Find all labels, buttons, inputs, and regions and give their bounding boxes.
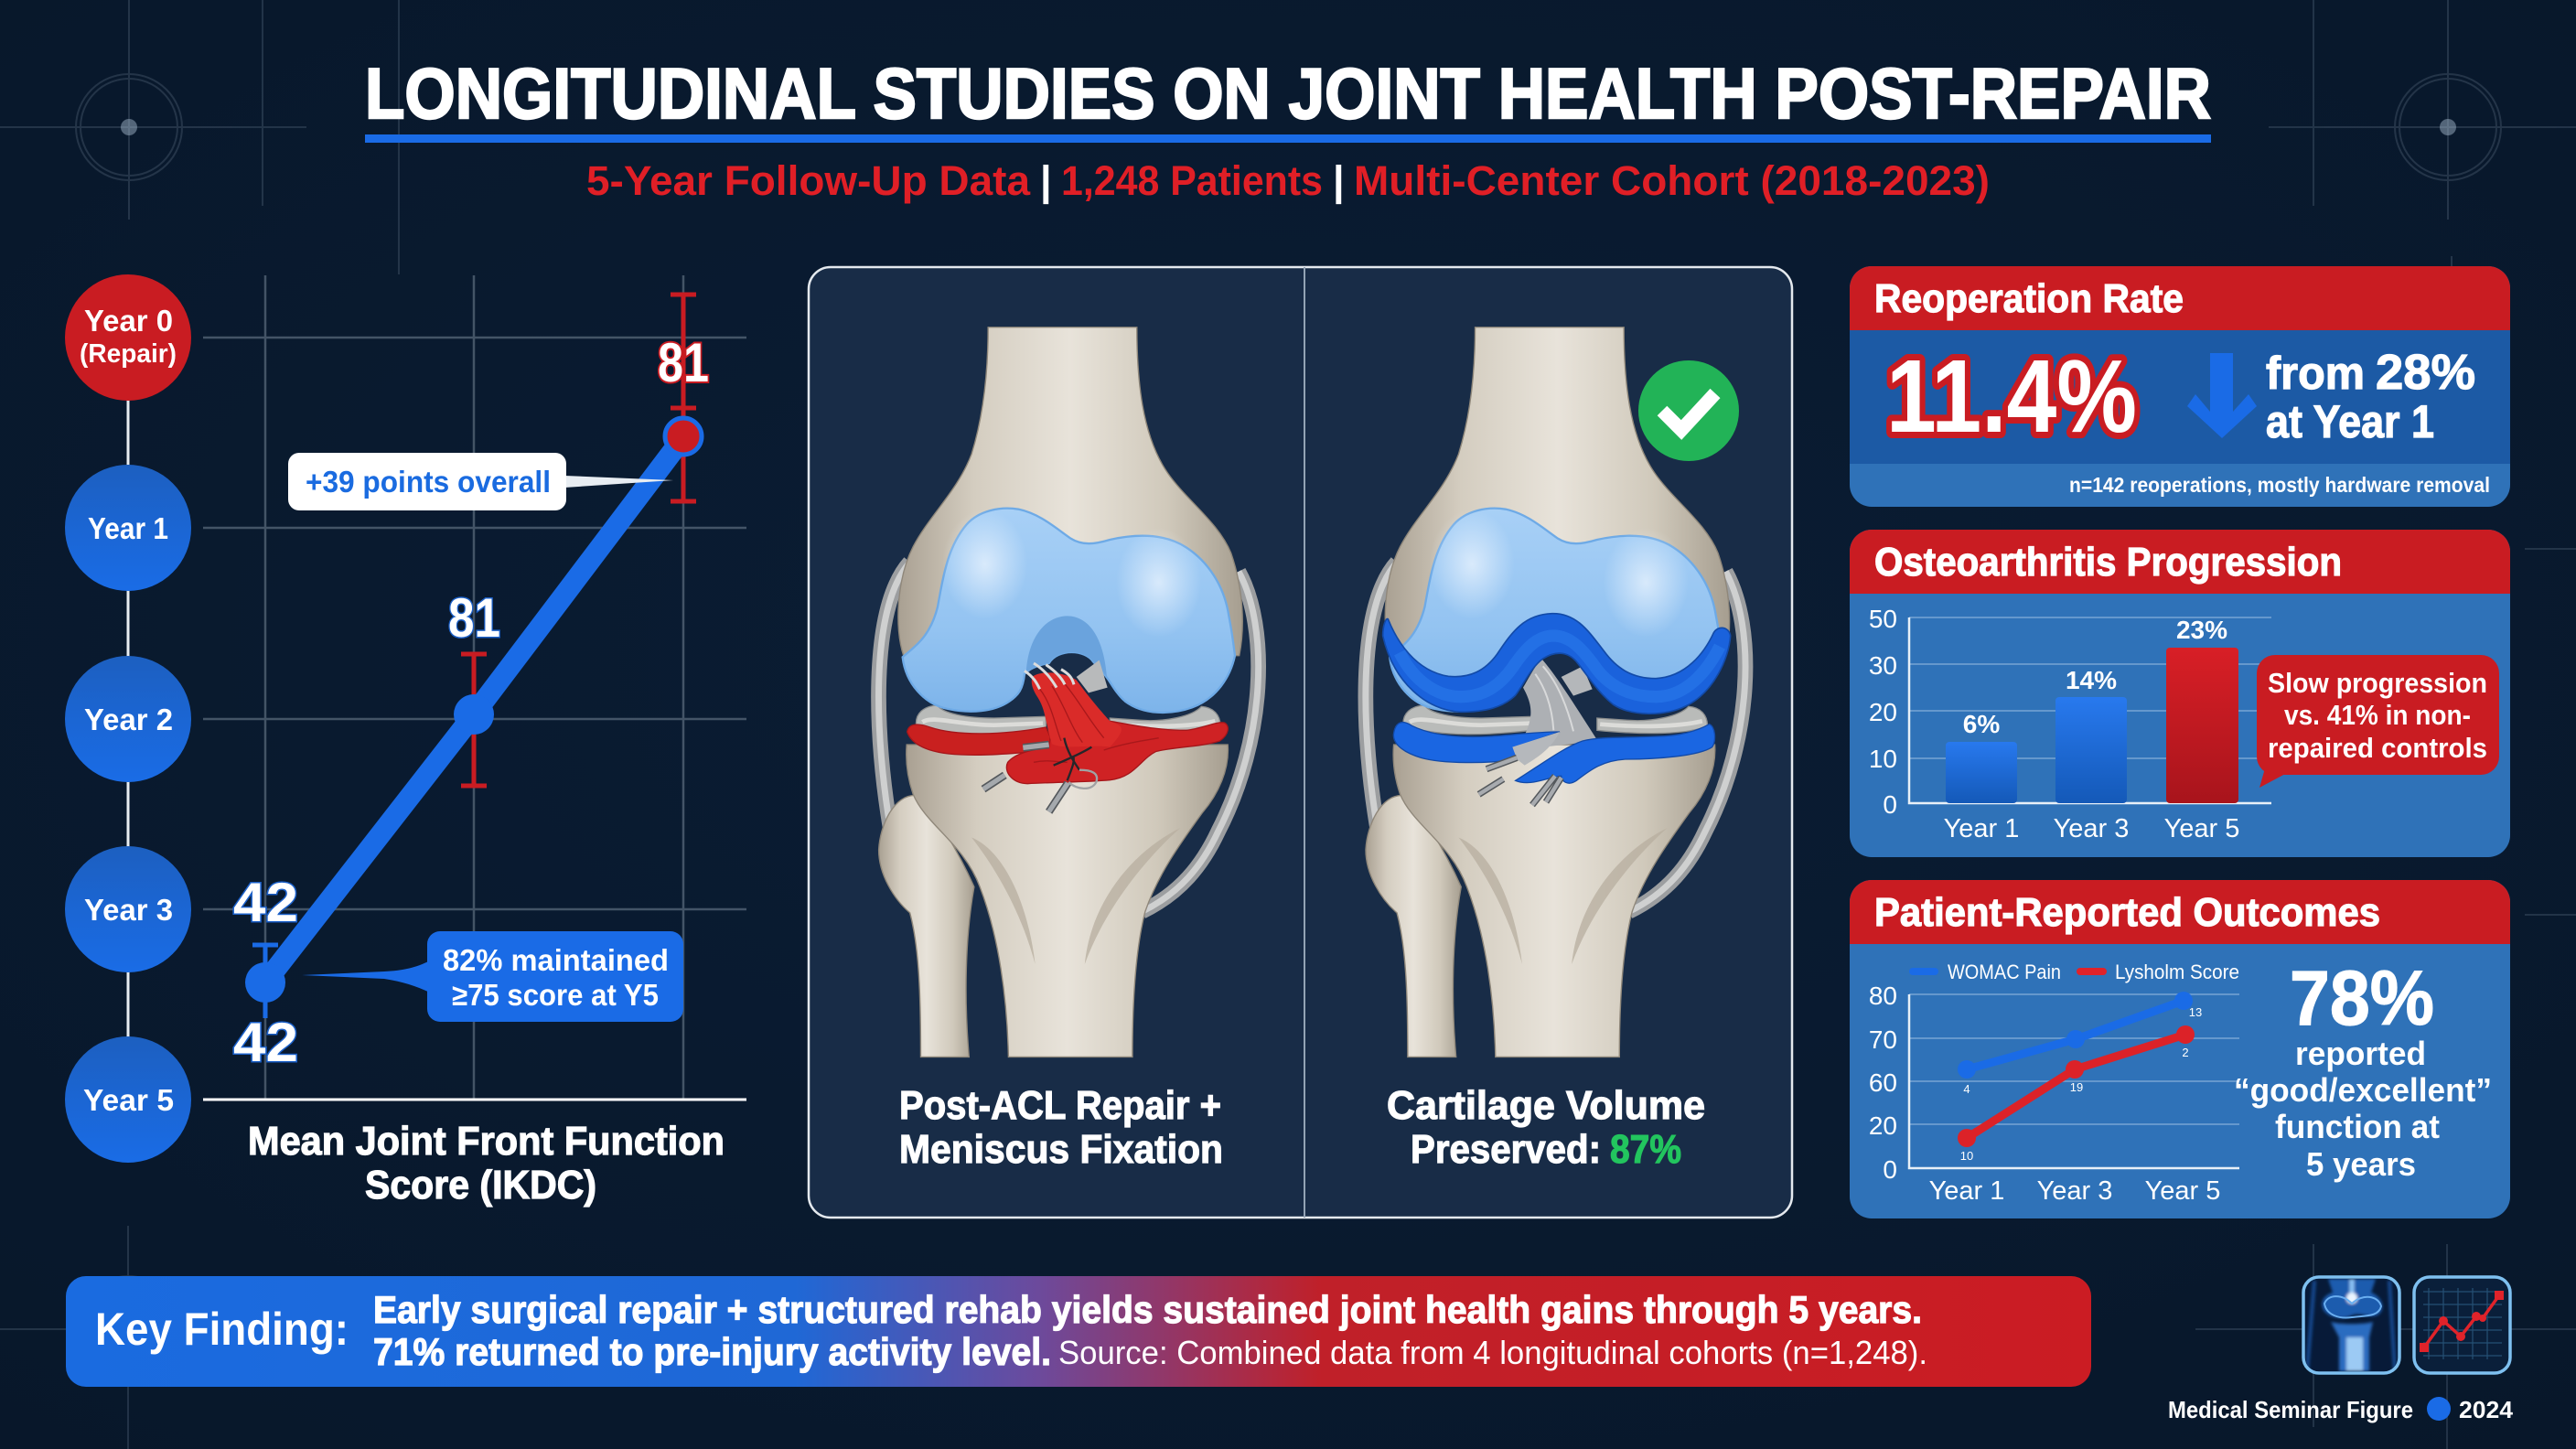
footer credit: 2024 [2459,1396,2514,1423]
bar chart: 14% [2066,666,2117,694]
stat description: function at [2275,1108,2440,1145]
bar chart: 0 [1883,790,1897,819]
bar chart [1869,605,2271,843]
panel: reoperation rate [1850,266,2510,507]
line chart: 20 [1869,1111,1897,1140]
stat: 11.4%: 11.4% [1886,338,2137,454]
bar chart: 30 [1869,651,1897,680]
line chart: 19 [2070,1080,2083,1094]
error bars [461,295,696,786]
icon: green check [1638,360,1739,461]
icon: knee x-ray [2303,1277,2399,1373]
data values: 81 [658,332,709,393]
data values: 81 [448,587,500,649]
label: left knee [899,1083,1223,1172]
comparison text: at Year 1 [2266,396,2434,447]
panel: knee comparison [809,267,1792,1218]
callout: +39 points overall [288,453,673,510]
line chart: 2 [2182,1046,2189,1059]
footer credit: Medical Seminar Figure [2168,1396,2413,1423]
stat: 78%: 78% [2290,955,2434,1041]
bar chart: Year 5 [2164,814,2239,843]
label: left knee: Meniscus Fixation [899,1127,1223,1172]
legend: WOMAC Pain [1948,961,2061,983]
label: right knee: Cartilage Volume [1387,1083,1705,1128]
timeline [65,274,191,1163]
line chart: 80 [1869,982,1897,1010]
axis title: Score (IKDC) [365,1163,596,1208]
data values: 42 [233,1012,298,1073]
comparison text: 28% [2376,345,2475,400]
callout: slow progression: vs. 41% in non- [2284,699,2471,731]
label: right knee: 87% [1610,1127,1681,1172]
line chart: 70 [1869,1025,1897,1054]
panel: osteoarthritis progression [1850,530,2510,857]
subtitle: 1,248 Patients [1061,157,1323,204]
axis title: Mean Joint Front Function [248,1119,724,1164]
comparison text [2266,345,2475,447]
callout: +39 points overall: +39 points overall [306,465,551,499]
illustration: knee after ACL repair and meniscus fixation [878,327,1259,1057]
line chart: Year 5 [2145,1176,2220,1206]
bar chart: 10 [1869,745,1897,773]
subtitle: | [1040,157,1052,205]
callout: 82% maintained: 82% maintained [443,943,669,977]
line chart: 60 [1869,1068,1897,1097]
line chart: Year 3 [2037,1176,2112,1206]
line chart: 0 [1883,1155,1897,1184]
data values: 42 [233,872,298,933]
subtitle: 5-Year Follow-Up Data [586,157,1031,204]
callout: slow progression: Slow progression [2268,667,2487,699]
label: right knee: Preserved: [1411,1127,1601,1172]
timeline: Year 0 [84,304,173,338]
subtitle [586,157,1990,205]
key finding banner: Source: Combined data from 4 longitudinal cohorts (n=1,248). [1058,1334,1927,1371]
illustration: knee with preserved cartilage [1366,327,1745,1057]
line chart: 10 [1960,1149,1973,1163]
panel: reoperation rate: Reoperation Rate [1874,276,2184,321]
timeline: (Repair) [80,339,177,369]
subtitle: | [1333,157,1345,205]
bar chart: 20 [1869,698,1897,726]
legend: Lysholm Score [2115,961,2239,983]
axis title [248,1119,724,1208]
line chart: Year 1 [1929,1176,2004,1206]
panel: osteoarthritis progression: Osteoarthritis Progression [1874,540,2342,585]
subtitle: Multi-Center Cohort (2018-2023) [1354,157,1990,204]
bar chart: 23% [2176,616,2227,644]
comparison text: from [2266,348,2365,399]
icon: trend chart [2414,1277,2510,1373]
timeline: Year 1 [88,511,168,545]
stat description: “good/excellent” [2234,1071,2492,1109]
stat description: reported [2295,1035,2426,1072]
line chart [1869,982,2239,1206]
timeline: Year 5 [83,1083,174,1117]
key finding banner: Key Finding: [95,1304,349,1355]
label: left knee: Post-ACL Repair + [899,1083,1221,1128]
key finding banner [66,1276,2091,1387]
stat description [2234,1035,2492,1183]
icon: down arrow [2187,353,2257,438]
panel: patient-reported outcomes: Patient-Reported Outcomes [1874,890,2380,935]
legend [1909,961,2239,983]
label: right knee [1387,1083,1705,1172]
panel: patient-reported outcomes [1850,880,2510,1218]
bar chart: Year 1 [1944,814,2019,843]
stat description: 5 years [2306,1145,2416,1183]
bar chart: 50 [1869,605,1897,633]
timeline: Year 3 [84,893,173,927]
bar chart: 6% [1963,710,2000,738]
callout: slow progression: repaired controls [2268,732,2487,764]
line chart: 13 [2189,1005,2202,1019]
callout: 82% maintained: ≥75 score at Y5 [452,978,659,1012]
data values [233,332,709,1073]
callout: slow progression [2257,655,2499,788]
footnote: n=142 reoperations, mostly hardware removal [2069,473,2490,497]
callout: 82% maintained [302,931,683,1022]
trend line [265,437,683,982]
line chart: mean joint function score [65,274,746,1208]
key finding banner: Early surgical repair + structured rehab yields sustained joint health gains through 5 years. [373,1288,1922,1331]
line chart: 4 [1963,1082,1970,1096]
title: LONGITUDINAL STUDIES ON JOINT HEALTH POST-REPAIR [365,53,2211,134]
key finding banner: 71% returned to pre-injury activity level. [373,1330,1051,1373]
timeline: Year 2 [84,703,173,736]
bar chart: Year 3 [2054,814,2129,843]
